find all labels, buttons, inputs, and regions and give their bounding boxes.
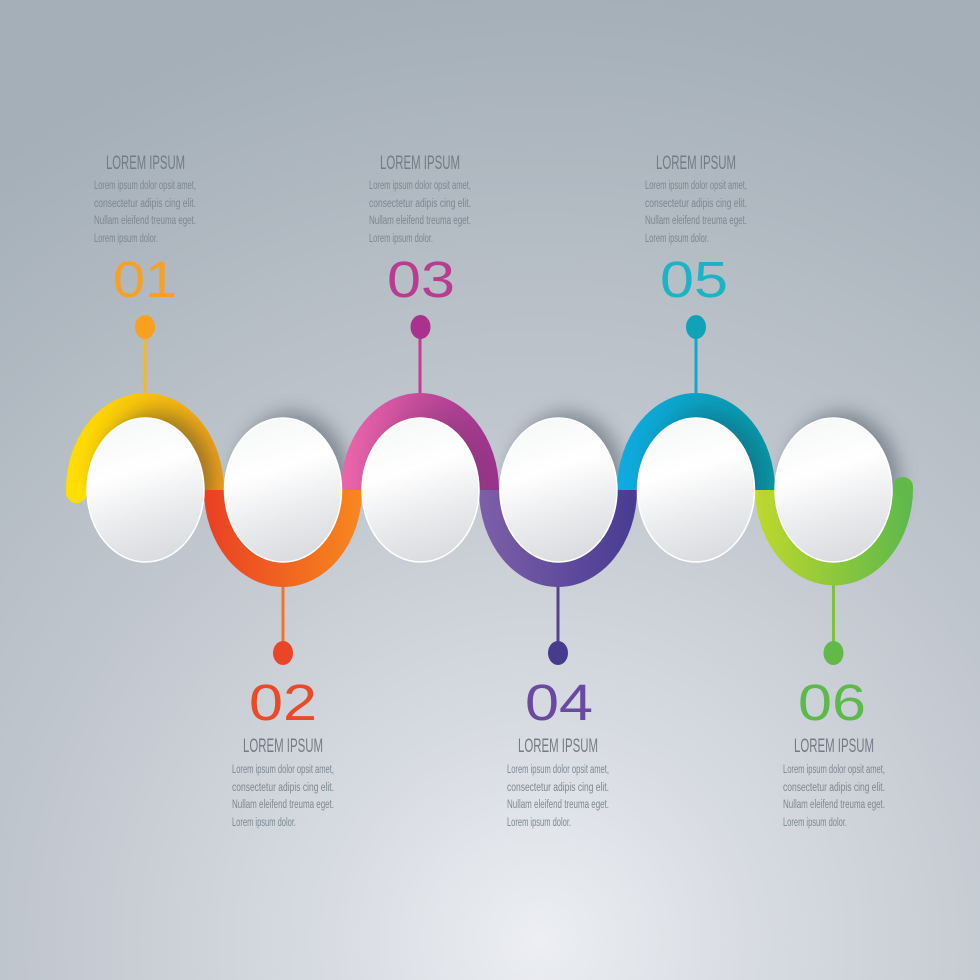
step 02 text: Lorem ipsum dolor. — [232, 817, 296, 829]
step 06 text: Nullam eleifend treuma eget. — [783, 799, 885, 811]
connector stems and dots — [135, 315, 844, 665]
shadows behind lower discs — [234, 412, 900, 554]
step 06 text: Lorem ipsum dolor opsit amet, — [783, 764, 885, 776]
step 04 text: consectetur adipis cing elit. — [507, 782, 609, 794]
ribbon band 01 — [66, 393, 224, 503]
step 01 text: Lorem ipsum dolor opsit amet, — [94, 180, 196, 192]
step 03 text — [369, 152, 471, 308]
step 05 text: consectetur adipis cing elit. — [645, 198, 747, 210]
step 01 text — [94, 152, 196, 308]
step 02 text: Lorem ipsum dolor opsit amet, — [232, 764, 334, 776]
step 04 text: Lorem ipsum dolor. — [507, 817, 571, 829]
white discs — [87, 418, 892, 562]
step 06 text: 06 — [798, 674, 866, 731]
step 04 text — [507, 674, 609, 829]
ribbon band 04 — [479, 490, 637, 587]
step 03 text: consectetur adipis cing elit. — [369, 198, 471, 210]
step 02 text: LOREM IPSUM — [243, 735, 323, 757]
step 01 text: LOREM IPSUM — [106, 152, 185, 174]
step 04 text: 04 — [525, 674, 593, 731]
step 02 text: consectetur adipis cing elit. — [232, 782, 334, 794]
step 01 text: consectetur adipis cing elit. — [94, 198, 196, 210]
step 02 text: 02 — [249, 674, 317, 731]
step 06 text: LOREM IPSUM — [794, 735, 874, 757]
step 05 text: Lorem ipsum dolor. — [645, 233, 709, 245]
shadow on band 01 — [87, 400, 224, 490]
step 04 text: Nullam eleifend treuma eget. — [507, 799, 609, 811]
step 02 text: Nullam eleifend treuma eget. — [232, 799, 334, 811]
step 05 text: LOREM IPSUM — [656, 152, 736, 174]
step 04 text: Lorem ipsum dolor opsit amet, — [507, 764, 609, 776]
step 03 text: Nullam eleifend treuma eget. — [369, 215, 471, 227]
step 01 text: 01 — [113, 251, 177, 308]
step 05 text: Nullam eleifend treuma eget. — [645, 215, 747, 227]
step 03 text: 03 — [387, 251, 455, 308]
ribbon band 06 — [755, 477, 913, 585]
step 02 text — [232, 674, 334, 829]
step 06 text — [783, 674, 885, 829]
ribbon band 02 — [204, 490, 362, 587]
ribbon band 05 — [617, 393, 775, 490]
step 06 text: consectetur adipis cing elit. — [783, 782, 885, 794]
step 03 text: Lorem ipsum dolor opsit amet, — [369, 180, 471, 192]
shadow on band 03 — [380, 408, 490, 490]
step 01 text: Nullam eleifend treuma eget. — [94, 215, 196, 227]
step 03 text: Lorem ipsum dolor. — [369, 233, 433, 245]
step 05 text: 05 — [660, 251, 728, 308]
step 04 text: LOREM IPSUM — [518, 735, 598, 757]
step 05 text — [645, 152, 747, 308]
step 03 text: LOREM IPSUM — [380, 152, 460, 174]
step 05 text: Lorem ipsum dolor opsit amet, — [645, 180, 747, 192]
step 01 text: Lorem ipsum dolor. — [94, 233, 158, 245]
shadow on band 05 — [648, 404, 770, 490]
ribbon band 03 — [341, 393, 499, 490]
step 06 text: Lorem ipsum dolor. — [783, 817, 847, 829]
